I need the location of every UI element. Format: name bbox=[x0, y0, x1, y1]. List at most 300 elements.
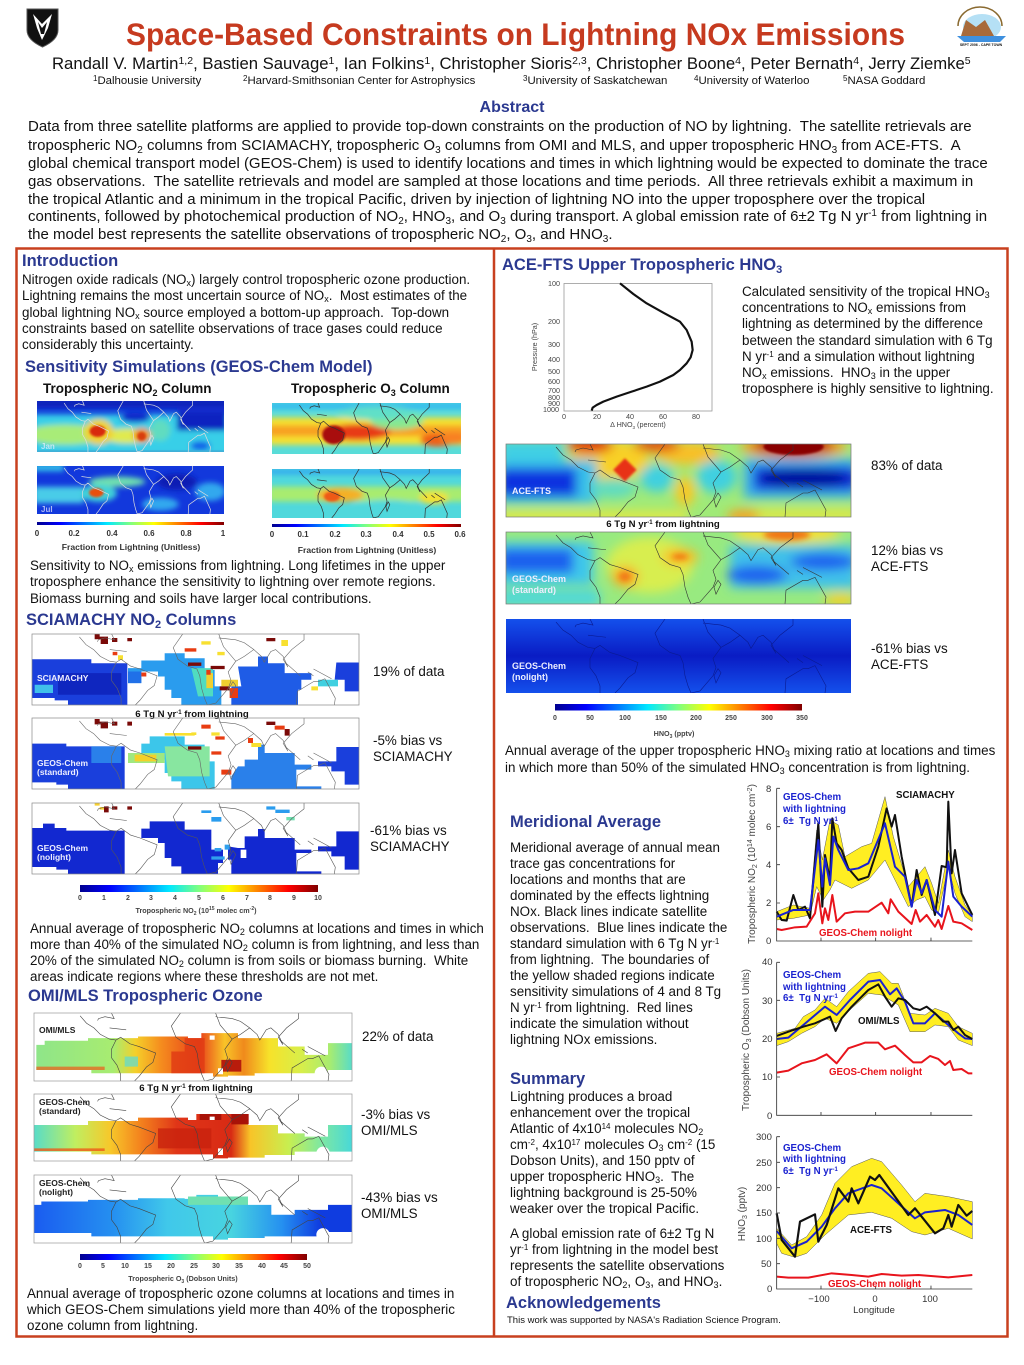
intro text: constraints based on satellite observations of trace gases could reduce bbox=[22, 321, 443, 336]
chart: HNO3 vertical profile: 500 bbox=[548, 367, 560, 376]
map: GEOS-Chem nolight NO2 bbox=[32, 803, 359, 874]
sensitivity description: Calculated sensitivity of the tropical HNO bbox=[742, 284, 985, 299]
intro text: source employed a bottom-up approach. Top-down bbox=[140, 305, 449, 320]
map: O3 January bbox=[269, 403, 467, 454]
sensitivity description: -1 bbox=[767, 350, 774, 359]
summary text: upper tropospheric HNO bbox=[510, 1169, 655, 1184]
sensitivity description: troposphere is highly sensitive to lightning. bbox=[742, 381, 994, 396]
colorbar: HNO3: 200 bbox=[690, 715, 702, 722]
heading: introduction: Introduction bbox=[22, 252, 118, 270]
colorbar: NO2 columns: 4 bbox=[173, 895, 177, 902]
map: OMI/MLS observed: OMI/MLS bbox=[39, 1025, 76, 1035]
caption: SCIAMACHY: 2 bbox=[179, 959, 184, 969]
summary text: 14 bbox=[602, 1122, 611, 1131]
side notes: OMI/MLS: -43% bias vs bbox=[361, 1190, 438, 1205]
chart: meridional NO2: 6 bbox=[766, 822, 771, 833]
side notes: SCIAMACHY: SCIAMACHY bbox=[370, 839, 450, 854]
intro text: x bbox=[324, 294, 329, 304]
caption: ACE-FTS: 3 bbox=[780, 766, 785, 776]
chart: meridional O3: GEOS-Chem bbox=[783, 970, 842, 981]
chart: meridional O3: Tropospheric O bbox=[741, 1042, 752, 1111]
map: GEOS-Chem standard O3 bbox=[34, 1094, 352, 1161]
summary text: enhancement over the tropical bbox=[510, 1105, 690, 1120]
caption: OMI/MLS: Annual average of tropospheric ozone columns at locations and times in bbox=[27, 1286, 454, 1301]
heading: sensitivity: Sensitivity Simulations (GEOS-Chem Model) bbox=[25, 358, 372, 376]
chart: meridional O3: with lightning bbox=[782, 982, 846, 993]
abstract text: , and HNO bbox=[532, 226, 603, 243]
colorbar: O3 columns: 35 bbox=[235, 1263, 243, 1270]
abstract text: . bbox=[608, 226, 612, 243]
summary text: , 4x10 bbox=[535, 1137, 571, 1152]
chart: meridional O3: 0 bbox=[767, 1111, 772, 1122]
summary text: weaker over the tropical Pacific. bbox=[509, 1201, 699, 1216]
colorbar: NO2 fraction: 0.2 bbox=[68, 529, 80, 538]
summary text: 17 bbox=[571, 1138, 581, 1147]
chart: meridional NO2: 4 bbox=[766, 860, 771, 871]
chart: meridional NO2: 6± Tg N yr bbox=[783, 816, 832, 827]
chart: meridional O3: 3 bbox=[746, 1038, 753, 1042]
chart: meridional O3: (Dobson Units) bbox=[741, 969, 752, 1039]
summary text: 3 bbox=[659, 1143, 664, 1153]
label: 6 Tg N per yr: from lightning bbox=[653, 519, 720, 530]
authors: Randall V. Martin bbox=[52, 54, 178, 73]
chart: meridional HNO3: -1 bbox=[832, 1167, 838, 1173]
authors: 5 bbox=[965, 55, 971, 67]
title: Space-Based Constraints on Lightning NOx Emissions bbox=[126, 16, 905, 52]
chart: meridional HNO3: ACE-FTS bbox=[850, 1225, 893, 1236]
intro text: x bbox=[186, 278, 191, 288]
colorbar: HNO3: 3 bbox=[670, 734, 673, 740]
colorbar: O3 columns: 45 bbox=[280, 1263, 288, 1270]
chart: meridional NO2: GEOS-Chem nolight bbox=[819, 928, 913, 939]
chart: meridional NO2: 2 bbox=[766, 898, 771, 909]
summary text: -2 bbox=[528, 1138, 536, 1147]
summary text: yr bbox=[510, 1242, 521, 1257]
chart: meridional O3: -1 bbox=[832, 994, 838, 1000]
chart: meridional HNO3: 100 bbox=[756, 1234, 772, 1245]
chart: meridional HNO3: (pptv) bbox=[737, 1187, 748, 1215]
abstract text: , HNO bbox=[404, 208, 445, 225]
chart: meridional HNO3: 0 bbox=[872, 1294, 878, 1305]
summary text: A global emission rate of 6±2 Tg N bbox=[510, 1226, 714, 1241]
authors: , Jerry Ziemke bbox=[859, 54, 965, 73]
summary text: -2 bbox=[685, 1138, 693, 1147]
logo: university crest bbox=[27, 9, 58, 47]
affiliations: Dalhousie University bbox=[97, 75, 202, 87]
caption: ACE-FTS: mixing ratio at locations and times bbox=[790, 743, 996, 758]
map: GEOS-Chem standard O3: (standard) bbox=[39, 1106, 81, 1116]
chart: meridional O3: 20 bbox=[762, 1034, 773, 1045]
map: GEOS-Chem nolight O3: (nolight) bbox=[39, 1187, 73, 1197]
chart: meridional O3: 40 bbox=[762, 957, 773, 968]
chart: meridional HNO3: with lightning bbox=[782, 1154, 846, 1165]
heading: SCIAMACHY: 2 bbox=[155, 619, 161, 631]
side notes: ACE-FTS: 83% of data bbox=[871, 458, 943, 473]
abstract text: 3 bbox=[832, 145, 838, 156]
colorbar: O3 fraction: 0.1 bbox=[297, 530, 309, 539]
intro text: global lightning NO bbox=[22, 305, 135, 320]
colorbar: NO2 columns: -2 bbox=[250, 906, 254, 912]
colorbar: NO2 fraction: 0 bbox=[35, 529, 40, 538]
chart: HNO3 vertical profile: 800 bbox=[548, 393, 560, 402]
chart: meridional NO2: Tropospheric NO bbox=[747, 868, 758, 944]
abstract text: columns from OMI and MLS, and upper tropospheric HNO bbox=[441, 137, 832, 154]
map: SCIAMACHY observed bbox=[32, 634, 359, 705]
chart: meridional NO2: 8 bbox=[766, 784, 771, 795]
map: GEOS-Chem standard HNO3 bbox=[500, 522, 857, 606]
sensitivity description: 3 bbox=[985, 290, 990, 300]
panel: OMI/MLS tropospheric ozone bbox=[26, 987, 455, 1333]
label: 6 Tg N per yr: -1 bbox=[176, 710, 182, 716]
summary text: 3 bbox=[714, 1280, 719, 1290]
map: GEOS-Chem nolight O3: GEOS-Chem bbox=[39, 1178, 90, 1188]
caption: SCIAMACHY bbox=[30, 921, 484, 984]
affiliations: 1 bbox=[93, 74, 98, 83]
meridional text: lightning NOx emissions. bbox=[510, 1032, 657, 1047]
chart: meridional NO2: GEOS-Chem bbox=[783, 792, 842, 803]
authors: , Bastien Sauvage bbox=[193, 54, 329, 73]
chart: meridional HNO3: Longitude bbox=[853, 1305, 895, 1316]
side notes: OMI/MLS bbox=[361, 1029, 438, 1221]
colorbar: NO2 columns: 0 bbox=[78, 895, 82, 902]
chart: HNO3 vertical profile: Pressure (hPa) bbox=[530, 323, 539, 371]
summary text: (15 bbox=[692, 1137, 715, 1152]
chart: meridional HNO3: 6± Tg N yr bbox=[783, 1166, 832, 1177]
chart: HNO3 vertical profile: 0 bbox=[562, 412, 566, 421]
colorbar: NO2 fraction: 0.6 bbox=[143, 529, 155, 538]
colorbar: O3 fraction: 0.3 bbox=[360, 530, 372, 539]
caption: SCIAMACHY: columns at locations and times in which bbox=[245, 921, 484, 936]
abstract text: from ACE-FTS. A bbox=[837, 137, 961, 154]
meridional text: indicate the simulation without bbox=[510, 1016, 689, 1031]
caption: SCIAMACHY: Annual average of tropospheric NO bbox=[30, 921, 240, 936]
side notes: OMI/MLS: OMI/MLS bbox=[361, 1123, 418, 1138]
chart: HNO3 vertical profile: 600 bbox=[548, 377, 560, 386]
colorbar: NO2 columns: 1 bbox=[102, 895, 106, 902]
meridional text bbox=[510, 840, 727, 1047]
meridional text: standard simulation with 6 Tg N yr bbox=[510, 936, 712, 951]
summary text: 3 bbox=[645, 1280, 650, 1290]
chart: meridional NO2: -2 bbox=[747, 787, 754, 794]
chart: meridional HNO3: 300 bbox=[756, 1132, 772, 1143]
side notes: ACE-FTS: -61% bias vs bbox=[871, 641, 948, 656]
chart: HNO3 vertical profile: 40 bbox=[626, 412, 634, 421]
chart: HNO3 vertical profile: 700 bbox=[548, 386, 560, 395]
chart: HNO3 vertical profile: 300 bbox=[548, 340, 560, 349]
colorbar: O3 columns: 50 bbox=[303, 1263, 311, 1270]
summary text: molecules O bbox=[580, 1137, 659, 1152]
abstract text: , and O bbox=[451, 208, 500, 225]
chart: meridional O3: GEOS-Chem nolight bbox=[829, 1067, 923, 1078]
caption: ACE-FTS bbox=[505, 743, 996, 776]
caption: SCIAMACHY: 20% of the simulated NO bbox=[30, 953, 179, 968]
colorbar: NO2 columns: (10 bbox=[197, 906, 209, 915]
chart: meridional NO2: SCIAMACHY bbox=[896, 790, 955, 801]
meridional text: sensitivity simulations of 4 and 8 Tg bbox=[510, 984, 721, 999]
colorbar: NO2 columns: 10 bbox=[314, 895, 322, 902]
chart: meridional NO2: molec cm bbox=[747, 794, 758, 839]
summary text: Lightning produces a broad bbox=[510, 1089, 672, 1104]
map: GEOS-Chem standard NO2 bbox=[32, 718, 359, 789]
chart: meridional NO2: 0 bbox=[766, 936, 771, 947]
abstract text: during transport. A global emission rate of 6±2 Tg N yr bbox=[506, 208, 868, 225]
caption: ACE-FTS: Annual average of the upper tropospheric HNO bbox=[505, 743, 785, 758]
map: ACE-FTS observed HNO3: ACE-FTS bbox=[512, 486, 551, 496]
chart: meridional NO2: with lightning bbox=[782, 804, 846, 815]
column title NO2: Column bbox=[158, 381, 212, 396]
sensitivity description: emissions. HNO bbox=[767, 365, 871, 380]
sensitivity description: and a simulation without lightning bbox=[774, 349, 975, 364]
map: OMI/MLS observed bbox=[34, 1013, 352, 1081]
colorbar: O3 columns: (Dobson Units) bbox=[184, 1274, 238, 1283]
abstract heading: Abstract bbox=[480, 99, 545, 116]
summary text: . The bbox=[660, 1169, 694, 1184]
heading: SCIAMACHY: SCIAMACHY NO bbox=[26, 611, 155, 629]
chart: meridional NO2: -1 bbox=[832, 817, 838, 823]
abstract text: from lightning in bbox=[877, 208, 987, 225]
map: GEOS-Chem nolight O3 bbox=[34, 1175, 352, 1243]
column title NO2: Tropospheric NO bbox=[43, 381, 153, 396]
map: GEOS-Chem standard HNO3: (standard) bbox=[512, 585, 556, 595]
colorbar: O3 columns: 0 bbox=[78, 1263, 82, 1270]
heading: meridional average: Meridional Average bbox=[510, 813, 661, 831]
authors: , Ian Folkins bbox=[334, 54, 424, 73]
abstract text: columns from SCIAMACHY, tropospheric O bbox=[143, 137, 435, 154]
authors: 1 bbox=[329, 55, 335, 67]
colorbar: NO2 columns: 9 bbox=[292, 895, 296, 902]
summary text: -1 bbox=[521, 1243, 529, 1252]
colorbar: O3 fraction: 0 bbox=[270, 530, 275, 539]
colorbar: HNO3: 100 bbox=[619, 715, 631, 722]
heading: acknowledgements: Acknowledgements bbox=[506, 1294, 661, 1312]
chart: meridional O3 bbox=[741, 957, 972, 1122]
affiliations: University of Waterloo bbox=[698, 75, 809, 87]
affiliations: 5 bbox=[843, 74, 848, 83]
panel: sensitivity simulations bbox=[24, 358, 467, 606]
sensitivity description: between the standard simulation with 6 Tg bbox=[742, 333, 993, 348]
map: NO2 July bbox=[34, 464, 225, 514]
affiliations: University of Saskatchewan bbox=[527, 75, 667, 87]
chart: meridional HNO3: 50 bbox=[761, 1259, 772, 1270]
affiliations bbox=[93, 74, 925, 87]
colorbar: NO2 columns: molec cm bbox=[215, 906, 250, 915]
map: SCIAMACHY observed: SCIAMACHY bbox=[37, 673, 89, 683]
caption: SCIAMACHY: column is from soils or biomass burning. White bbox=[184, 953, 468, 968]
colorbar: O3 fraction: 0.4 bbox=[392, 530, 404, 539]
sensitivity description: in the upper bbox=[876, 365, 951, 380]
chart: meridional O3: 6± Tg N yr bbox=[783, 993, 832, 1004]
map: GEOS-Chem standard O3: GEOS-Chem bbox=[39, 1097, 90, 1107]
sensitivity text: troposphere enhance the sensitivity to lightning over remote regions. bbox=[30, 574, 436, 589]
map: GEOS-Chem nolight HNO3: GEOS-Chem bbox=[512, 661, 566, 671]
intro text bbox=[22, 272, 470, 352]
map: O3 July bbox=[269, 469, 465, 518]
meridional text: trace gas concentrations for bbox=[510, 856, 676, 871]
meridional text: observations. Blue lines indicate the bbox=[510, 920, 727, 935]
side notes: ACE-FTS: ACE-FTS bbox=[871, 559, 928, 574]
caption: SCIAMACHY: areas indicate regions where these thresholds are not met. bbox=[30, 969, 378, 984]
colorbar: NO2 columns: 2 bbox=[126, 895, 130, 902]
side notes: OMI/MLS: -3% bias vs bbox=[361, 1107, 431, 1122]
panel frame bbox=[16, 248, 1008, 1337]
colorbar: NO2 columns: 5 bbox=[197, 895, 201, 902]
summary text: . bbox=[719, 1274, 722, 1289]
caption: OMI/MLS: ozone column from lightning. bbox=[27, 1318, 198, 1333]
sensitivity text bbox=[30, 558, 446, 606]
authors: 1,2 bbox=[178, 55, 193, 67]
caption: OMI/MLS: which GEOS-Chem simulations yield more than 40% of the tropospheric bbox=[26, 1302, 455, 1317]
colorbar: NO2 columns: Tropospheric NO bbox=[135, 906, 194, 915]
sensitivity description: x bbox=[868, 306, 873, 316]
caption: OMI/MLS bbox=[26, 1286, 455, 1333]
sensitivity description: x bbox=[762, 371, 767, 381]
colorbar: NO2 columns: ) bbox=[254, 906, 257, 915]
summary text: Dobson Units), and 150 pptv of bbox=[510, 1153, 695, 1168]
colorbar: O3 columns: Tropospheric O bbox=[128, 1274, 181, 1283]
panel: SCIAMACHY NO2 columns bbox=[26, 611, 484, 984]
chart: meridional HNO3: 0 bbox=[767, 1284, 772, 1295]
chart: HNO3 vertical profile: 1000 bbox=[543, 405, 559, 414]
chart: meridional HNO3 bbox=[737, 1132, 972, 1316]
summary text: of tropospheric NO bbox=[510, 1274, 622, 1289]
chart: HNO3 vertical profile: 200 bbox=[548, 317, 560, 326]
colorbar: NO2 fraction: 0.8 bbox=[180, 529, 192, 538]
colorbar: NO2 columns: 3 bbox=[149, 895, 153, 902]
label: 6 Tg N per yr: 6 Tg N yr bbox=[606, 519, 647, 530]
affiliations: 4 bbox=[694, 74, 699, 83]
panel: summary bbox=[509, 1070, 725, 1290]
authors: 1 bbox=[424, 55, 430, 67]
intro text: . Most estimates of the bbox=[329, 288, 467, 303]
heading: ACE-FTS: 3 bbox=[776, 264, 782, 276]
sensitivity description: N yr bbox=[742, 349, 767, 364]
abstract text: 3 bbox=[445, 216, 451, 227]
column title O3: 3 bbox=[391, 388, 396, 398]
chart: HNO3 vertical profile: 400 bbox=[548, 355, 560, 364]
colorbar: O3 columns: 5 bbox=[101, 1263, 105, 1270]
sensitivity description: lightning as determined by the difference bbox=[742, 316, 983, 331]
chart: meridional HNO3: GEOS-Chem nolight bbox=[828, 1279, 922, 1290]
colorbar: NO2 fraction: Fraction from Lightning (Unitless) bbox=[62, 542, 200, 552]
chart: meridional NO2: ) bbox=[747, 784, 758, 787]
map: NO2 July: Jul bbox=[41, 505, 53, 514]
abstract text: 2 bbox=[501, 234, 507, 245]
summary text: Atlantic of 4x10 bbox=[510, 1121, 602, 1136]
abstract text: 3 bbox=[435, 145, 441, 156]
logo: conference emblem: SEPT 2006 - CAPE TOWN bbox=[960, 43, 1003, 47]
meridional text: locations and months that are bbox=[510, 872, 686, 887]
meridional text: dominated by the effects lightning bbox=[510, 888, 709, 903]
chart: HNO3 vertical profile: (percent) bbox=[635, 420, 666, 429]
meridional text: -1 bbox=[712, 937, 720, 946]
colorbar: HNO3: 350 bbox=[796, 715, 808, 722]
colorbar: O3 fraction: 0.5 bbox=[423, 530, 435, 539]
summary text: molecules NO bbox=[610, 1121, 698, 1136]
chart: meridional NO2: 14 bbox=[747, 839, 754, 847]
chart: HNO3 vertical profile: 3 bbox=[633, 425, 636, 430]
summary text: cm bbox=[510, 1137, 528, 1152]
caption: SCIAMACHY: 2 bbox=[240, 927, 245, 937]
abstract text: global chemical transport model (GEOS-Chem) is used to identify locations and times in which lightning would be expected to dominate the trace bbox=[28, 155, 988, 172]
colorbar: HNO3 bbox=[553, 704, 808, 740]
intro text: x bbox=[135, 311, 140, 321]
map: NO2 January bbox=[24, 398, 240, 455]
side notes: ACE-FTS bbox=[871, 458, 948, 672]
colorbar: HNO3: 150 bbox=[655, 715, 667, 722]
meridional text: Meridional average of annual mean bbox=[510, 840, 720, 855]
panel: meridional average bbox=[510, 813, 727, 1047]
colorbar: HNO3: 250 bbox=[725, 715, 737, 722]
colorbar: O3 columns: 15 bbox=[144, 1263, 152, 1270]
summary text bbox=[509, 1089, 725, 1290]
meridional text: from lightning. Red lines bbox=[542, 1000, 693, 1015]
summary text: , and HNO bbox=[650, 1274, 714, 1289]
sensitivity text: Biomass burning and soils have larger local contributions. bbox=[30, 591, 372, 606]
affiliations: NASA Goddard bbox=[847, 75, 925, 87]
caption: SCIAMACHY: more than 40% of the simulated NO bbox=[30, 937, 243, 952]
authors: 2,3 bbox=[572, 55, 587, 67]
colorbar: O3 columns: 40 bbox=[258, 1263, 266, 1270]
sensitivity description: NO bbox=[742, 365, 762, 380]
chart: meridional NO2: (10 bbox=[747, 847, 758, 864]
chart: meridional HNO3: GEOS-Chem bbox=[783, 1143, 842, 1154]
chart: meridional NO2 bbox=[747, 784, 972, 947]
chart: meridional NO2: 2 bbox=[752, 864, 759, 868]
colorbar: NO2 columns: 8 bbox=[268, 895, 272, 902]
affiliations: 3 bbox=[523, 74, 528, 83]
colorbar: HNO3: (pptv) bbox=[672, 729, 695, 738]
summary text: represents the satellite observations bbox=[510, 1258, 725, 1273]
colorbar: NO2 fraction bbox=[35, 522, 226, 552]
colorbar: NO2 columns: 6 bbox=[221, 895, 225, 902]
map: GEOS-Chem nolight NO2: GEOS-Chem bbox=[37, 843, 88, 853]
map: GEOS-Chem nolight NO2: (nolight) bbox=[37, 852, 71, 862]
column title NO2: 2 bbox=[153, 388, 158, 398]
chart: meridional HNO3: 3 bbox=[742, 1215, 749, 1219]
map: GEOS-Chem nolight HNO3: (nolight) bbox=[512, 672, 548, 682]
summary text: from lightning in the model best bbox=[528, 1242, 718, 1257]
chart: meridional HNO3: 200 bbox=[756, 1183, 772, 1194]
side notes: OMI/MLS: 22% of data bbox=[362, 1029, 434, 1044]
colorbar: NO2 columns: 15 bbox=[209, 906, 215, 912]
side notes: SCIAMACHY: -61% bias vs bbox=[370, 823, 447, 838]
abstract text: 2 bbox=[398, 216, 404, 227]
colorbar: NO2 columns bbox=[78, 885, 322, 917]
abstract text: gas observations. The satellite retrievals and model are sampled at those locations and time periods. All three retrievals exhibit a maximum in bbox=[28, 173, 973, 190]
caption: ACE-FTS: concentration is from lightning. bbox=[785, 760, 970, 775]
chart: meridional HNO3: 100 bbox=[922, 1294, 938, 1305]
colorbar: NO2 fraction: 1 bbox=[221, 529, 226, 538]
side notes: SCIAMACHY bbox=[370, 664, 453, 854]
side notes: ACE-FTS: ACE-FTS bbox=[871, 657, 928, 672]
panel: ACE-FTS upper tropospheric HNO3 bbox=[500, 256, 996, 776]
sensitivity text: x bbox=[129, 564, 134, 574]
heading: summary: Summary bbox=[510, 1070, 586, 1088]
authors: , Peter Bernath bbox=[741, 54, 853, 73]
colorbar: NO2 fraction: 0.4 bbox=[106, 529, 118, 538]
colorbar: O3 columns: 30 bbox=[212, 1263, 220, 1270]
sensitivity description: 3 bbox=[871, 371, 876, 381]
heading: ACE-FTS: ACE-FTS Upper Tropospheric HNO bbox=[502, 256, 776, 274]
meridional text: N yr bbox=[510, 1000, 535, 1015]
map: GEOS-Chem nolight HNO3 bbox=[506, 619, 851, 693]
chart: HNO3 vertical profile bbox=[530, 279, 712, 430]
chart: meridional O3: 30 bbox=[762, 996, 773, 1007]
heading: SCIAMACHY: Columns bbox=[161, 611, 236, 629]
colorbar: O3 columns bbox=[78, 1254, 311, 1285]
sensitivity text: Sensitivity to NO bbox=[30, 558, 129, 573]
abstract text: , O bbox=[506, 226, 526, 243]
